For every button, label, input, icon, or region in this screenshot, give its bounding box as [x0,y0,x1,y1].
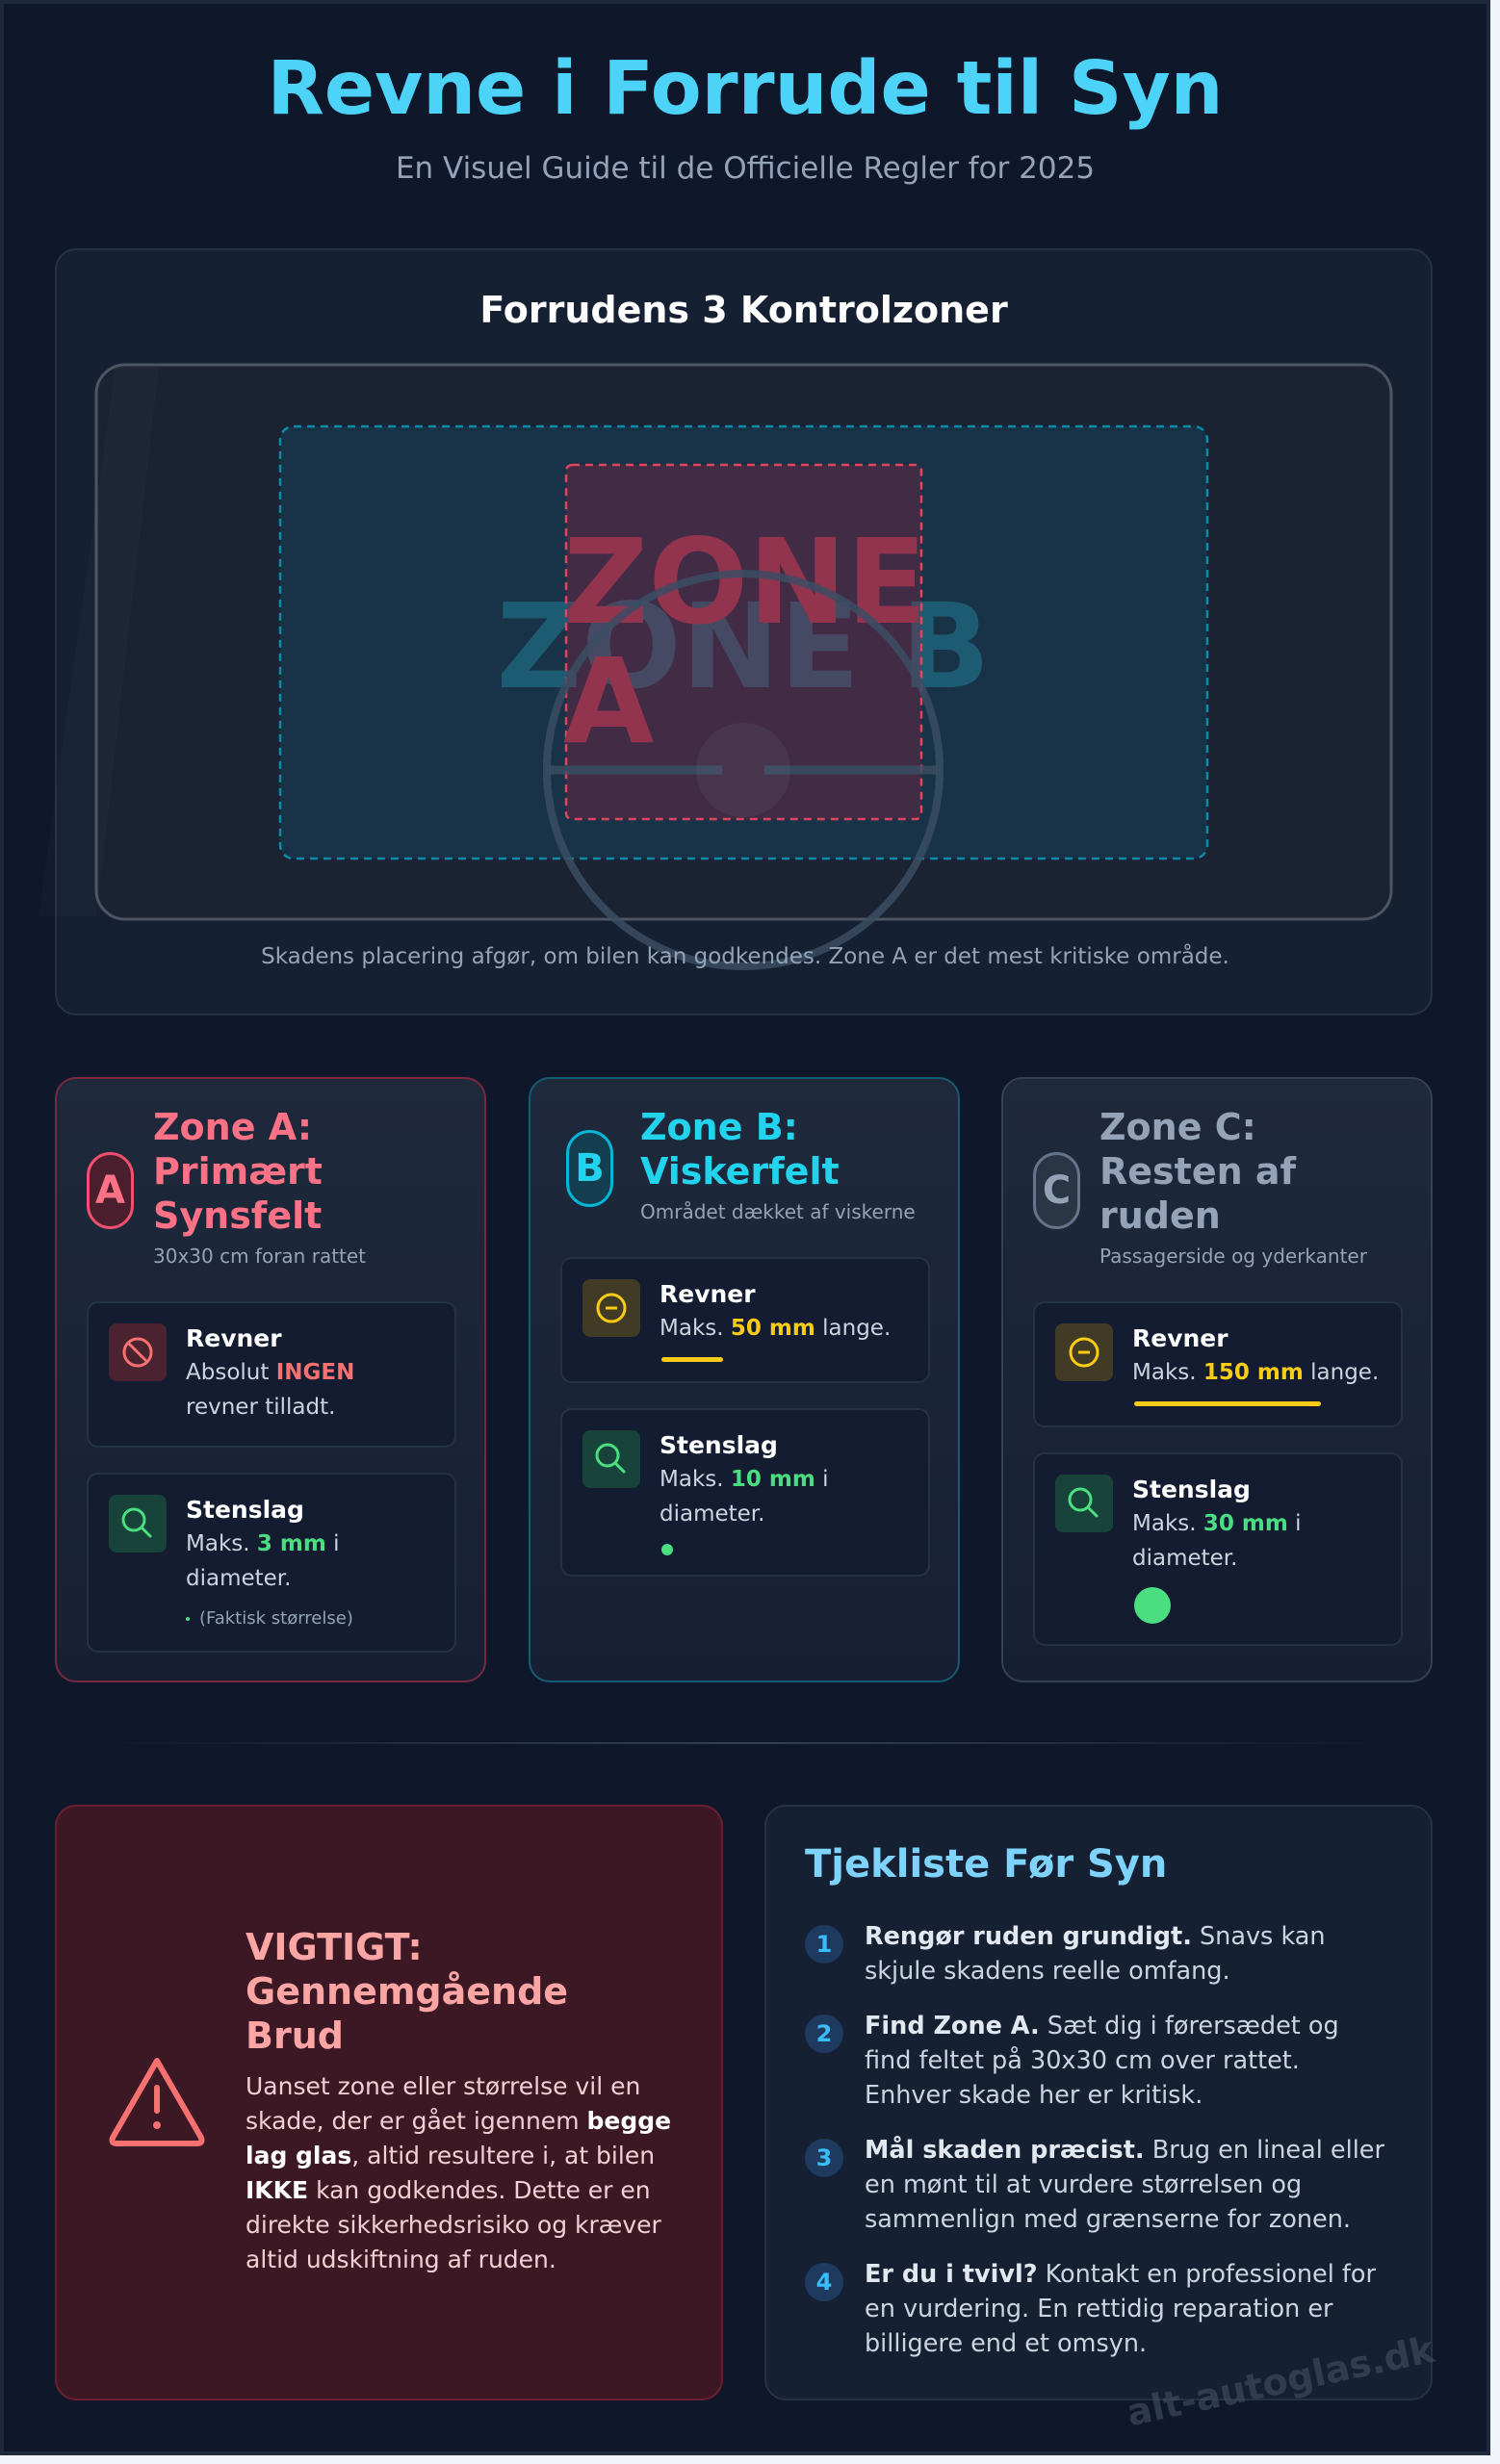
icon: warning triangle [110,2058,204,2146]
icon: forbidden [109,1323,167,1381]
checklist item 2: Enhver skade her er kritisk. [865,2081,1203,2110]
zone B area: ZONE B [496,578,991,715]
zone C title: ruden [1099,1194,1221,1237]
icon: steering wheel [547,574,940,966]
checklist item 4: en vurdering. En rettidig reparation er [865,2295,1333,2323]
checklist item 1: 1 [816,1931,832,1958]
item: chips B [560,1408,930,1577]
subtitle: En Visuel Guide til de Officielle Regler for 2025 [396,151,1095,186]
zone B title: Viskerfelt [640,1150,840,1193]
zone A title: Zone A: [153,1106,312,1148]
dot 30mm [1134,1587,1171,1624]
badge B: B [575,1146,605,1191]
zone A subtitle: 30x30 cm foran rattet [153,1245,366,1268]
item: cracks A: Absolut INGEN revner tilladt. [186,1360,354,1420]
item: cracks C [1033,1301,1403,1427]
title: Revne i Forrude til Syn [268,46,1223,132]
checklist item 2: 2 [816,2020,832,2047]
checklist item 3 [805,2136,1384,2234]
item: cracks A: Revner [186,1324,282,1352]
checklist item 1: skjule skadens reelle omfang. [865,1957,1230,1986]
checklist item 3: 3 [816,2144,832,2171]
item: chips C [1033,1452,1403,1646]
zone C title: Resten af [1099,1150,1296,1193]
checklist item 3: Mål skaden præcist. Brug en lineal eller [865,2136,1384,2165]
checklist item 4: Er du i tvivl? Kontakt en professionel for [865,2260,1376,2289]
dot 10mm [661,1544,673,1555]
checklist item 1 [805,1922,1326,1986]
zone B title: Zone B: [640,1106,798,1148]
warning title: VIGTIGT: [246,1926,423,1968]
zone A title [153,1106,323,1237]
checklist item 2: Find Zone A. Sæt dig i førersædet og [865,2012,1339,2040]
badge A: A [95,1168,125,1213]
badge B [566,1130,613,1207]
zone B title [640,1106,840,1193]
item: chips A: Stenslag [186,1496,304,1524]
icon: minus circle [582,1279,640,1337]
zone A title: Primært [153,1150,323,1193]
zone A area: A [563,633,654,770]
checklist item 3: en mønt til at vurdere størrelsen og [865,2170,1302,2199]
windshield frame [39,365,1391,919]
bar 150mm [1134,1401,1321,1406]
zone B area [280,426,1207,859]
zone C subtitle: Passagerside og yderkanter [1099,1245,1367,1268]
checklist item 2 [805,2012,1339,2110]
zone C title [1099,1106,1296,1237]
badge A [87,1152,134,1229]
windshield diagram [94,364,1392,970]
icon: magnifier [582,1430,640,1488]
item: chips C: Maks. 30 mm i diameter. [1132,1511,1302,1571]
panel: zone B [529,1077,960,1682]
zone B subtitle: Området dækket af viskerne [640,1200,916,1223]
item: cracks C: Maks. 150 mm lange. [1132,1360,1379,1385]
icon: magnifier [1055,1475,1113,1532]
heading: zones: Forrudens 3 Kontrolzoner [479,289,1008,331]
panel: warning [55,1805,723,2400]
panel: checklist [764,1805,1433,2400]
zone A area: ZONE [563,514,927,651]
badge C: C [1043,1168,1071,1213]
icon: magnifier [109,1495,167,1553]
checklist item 1: Rengør ruden grundigt. Snavs kan [865,1922,1326,1951]
checklist item 4: billigere end et omsyn. [865,2329,1147,2358]
checklist item 2: find feltet på 30x30 cm over rattet. [865,2046,1300,2075]
size note: (Faktisk størrelse) [199,1608,353,1629]
checklist item 4 [805,2260,1376,2358]
panel: zone C [1001,1077,1433,1682]
item: chips C: Stenslag [1132,1476,1251,1503]
warning text: Uanset zone eller størrelse vil en skade, der er gået igennem begge lag glas, altid resultere i, at bilen IKKE kan godkendes. Dette er en direkte sikkerhedsrisiko og kræver altid udskiftning af ruden. [246,2072,671,2273]
warning title [246,1926,568,2057]
item: cracks B [560,1257,930,1383]
checklist item 3: sammenlign med grænserne for zonen. [865,2205,1351,2234]
warning title: Gennemgående [246,1970,568,2013]
zone C title: Zone C: [1099,1106,1256,1148]
item: cracks C: Revner [1132,1324,1228,1352]
badge C [1033,1152,1080,1229]
item: chips B: Stenslag [659,1431,778,1459]
item: cracks B: Maks. 50 mm lange. [659,1316,891,1341]
checklist item 4: 4 [816,2269,832,2296]
item: cracks A [87,1301,456,1448]
item: chips A: Maks. 3 mm i diameter. [186,1531,340,1591]
caption: Skadens placering afgør, om bilen kan godkendes. Zone A er det mest kritiske område. [261,944,1229,969]
zone A title: Synsfelt [153,1194,322,1237]
zone A area [563,465,927,819]
panel: control zones [55,248,1433,1015]
icon: minus circle [1055,1323,1113,1381]
watermark: alt-autoglas.dk [1123,2328,1438,2434]
panel: zone A [55,1077,486,1682]
warning title: Brud [246,2015,344,2057]
checklist title: Tjekliste Før Syn [805,1842,1167,1886]
bar 50mm [661,1357,723,1362]
item: chips B: Maks. 10 mm i diameter. [659,1467,829,1527]
item: cracks B: Revner [659,1280,756,1308]
item: chips A [87,1473,456,1653]
